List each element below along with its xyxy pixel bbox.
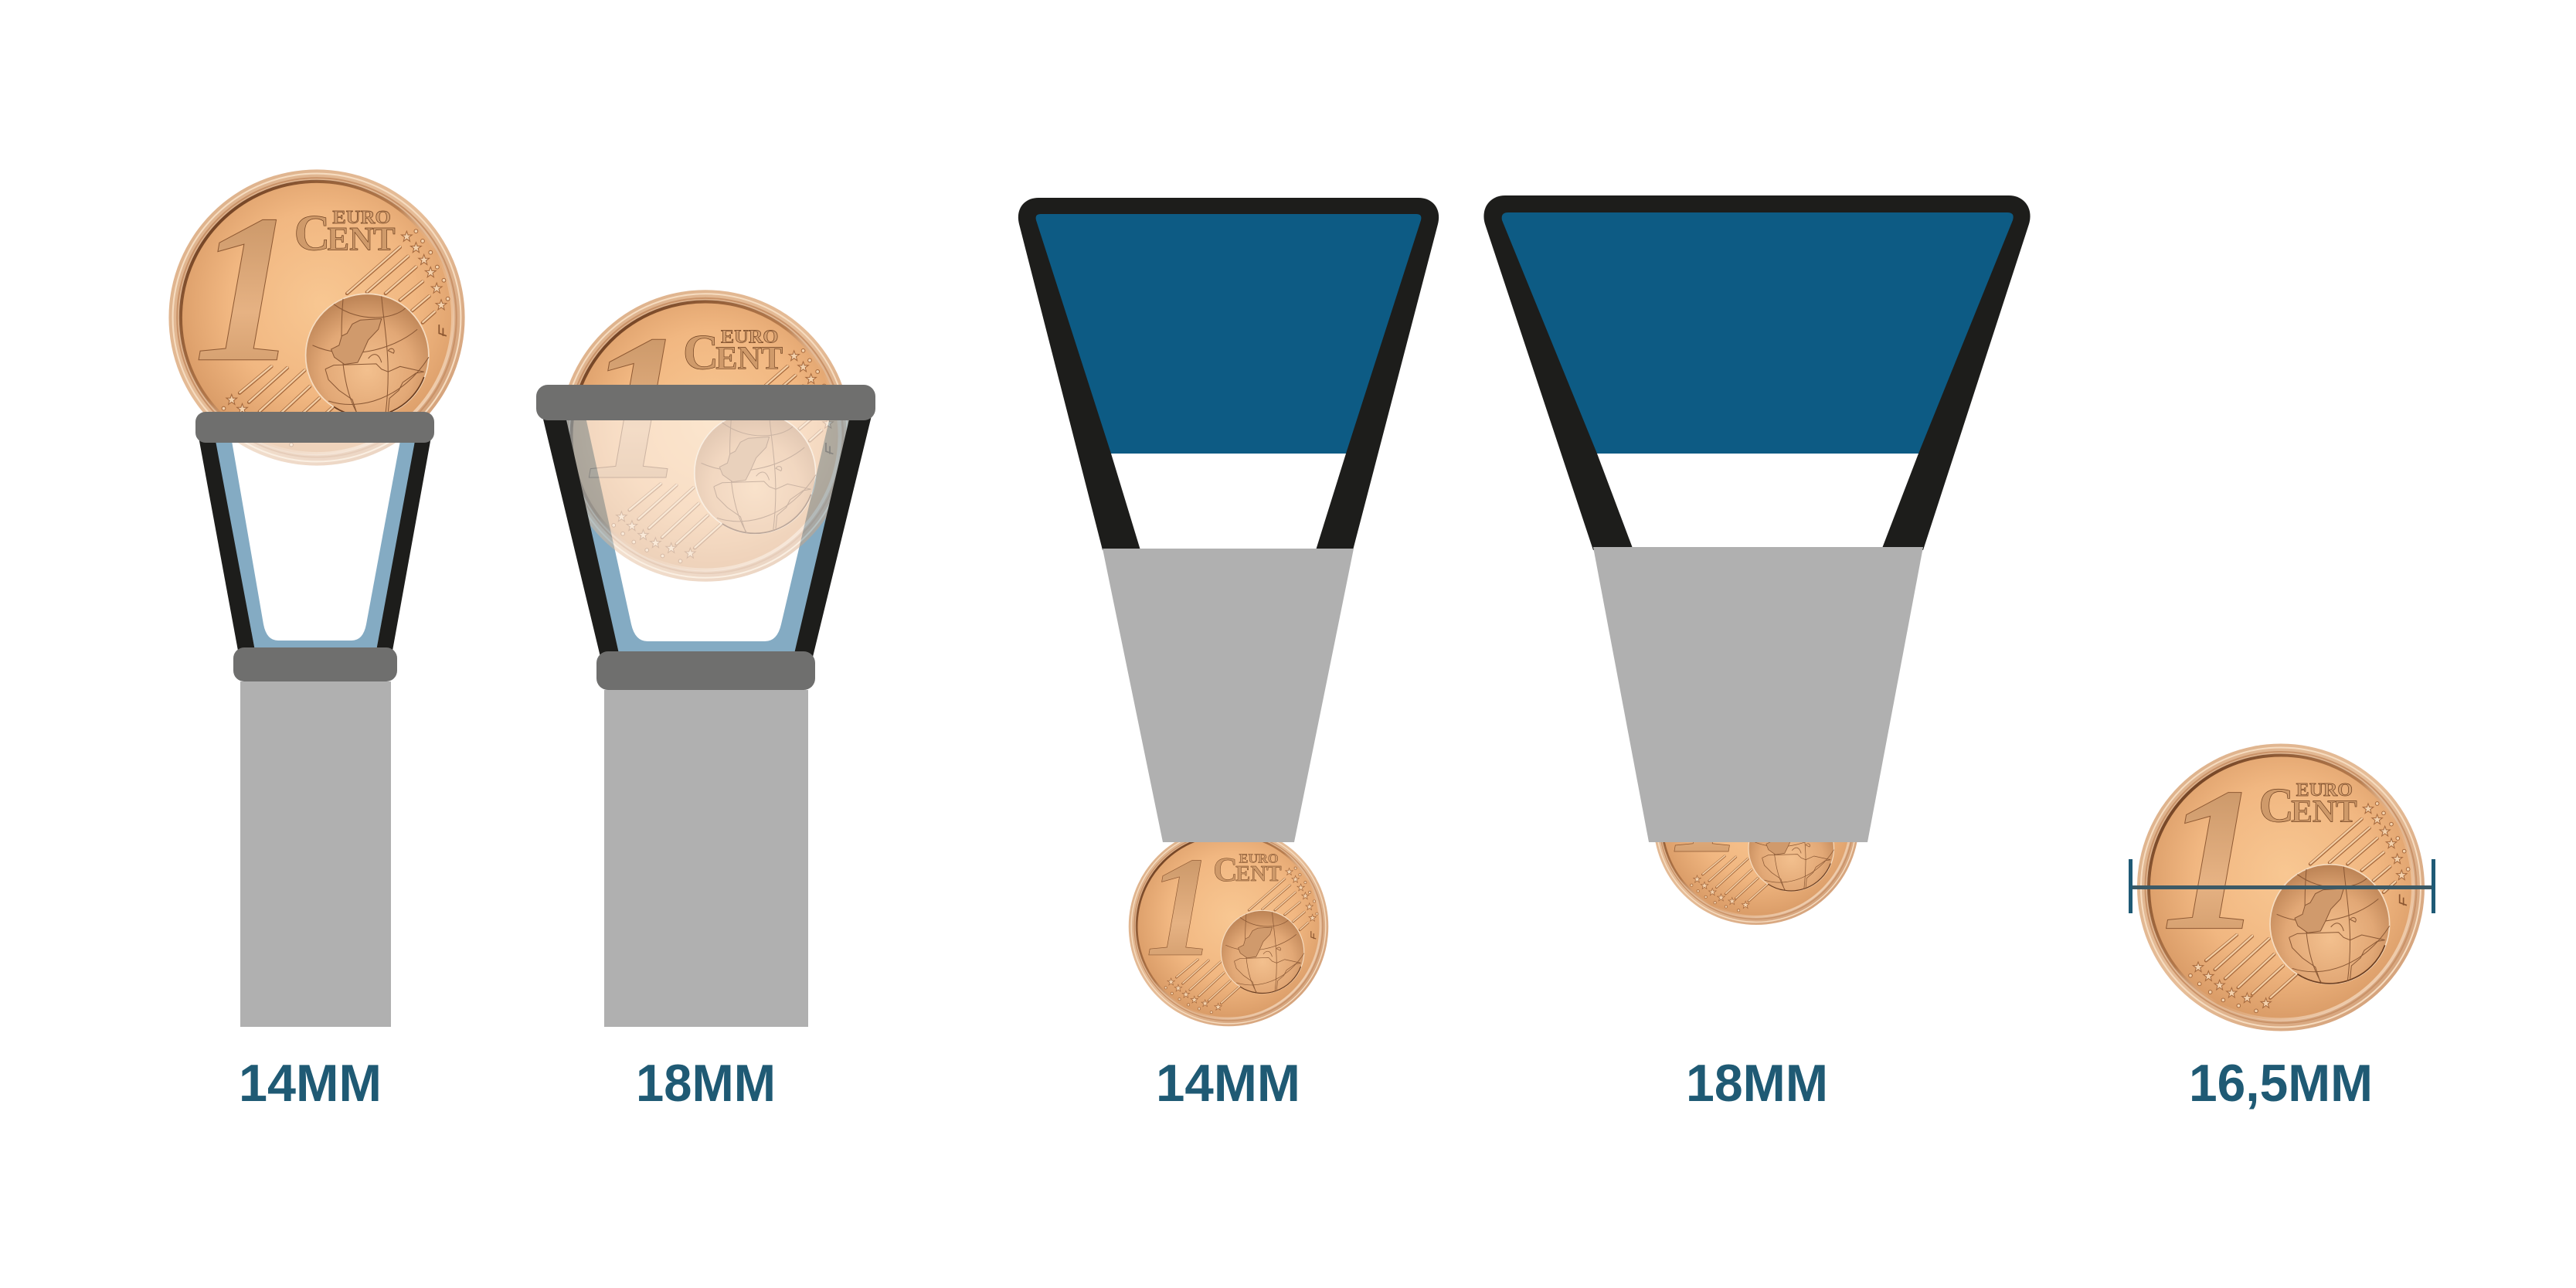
black funnel outline	[1483, 195, 2031, 550]
grey stem	[604, 690, 808, 1027]
label: 14MM: 14MM	[1156, 1054, 1300, 1113]
white hollow	[231, 437, 401, 641]
panel: coin diameter	[2129, 743, 2435, 1113]
white gap	[1111, 454, 1346, 550]
panel: coin over 14mm opening, side view	[168, 169, 465, 1113]
white hollow	[586, 417, 830, 641]
blue inner lining	[564, 417, 851, 657]
panel: 14mm funnel with coin passing through	[1018, 198, 1439, 1113]
grey tapered body	[1593, 547, 1923, 842]
coin under funnel	[1653, 719, 1859, 925]
lower grey band	[596, 651, 815, 690]
blue inner lining	[214, 437, 416, 651]
label: 18MM: 18MM	[636, 1054, 776, 1113]
grey tapered body	[1103, 549, 1354, 842]
blue fill	[1036, 214, 1421, 454]
panel: 18mm funnel with coin stuck	[1483, 195, 2031, 1113]
coin resting in opening	[168, 169, 465, 466]
black tube walls	[541, 410, 873, 657]
black funnel outline	[1018, 198, 1439, 550]
coin below funnel	[1129, 827, 1328, 1026]
coin dropped in opening	[559, 290, 851, 582]
diameter line	[2129, 859, 2435, 913]
coin full view	[2137, 743, 2425, 1031]
blue fill	[1502, 212, 2014, 454]
label: 14MM: 14MM	[239, 1054, 382, 1113]
label: 16,5MM: 16,5MM	[2189, 1054, 2373, 1113]
upper grey band	[536, 385, 875, 420]
lower grey band	[233, 647, 397, 681]
grey stem	[240, 681, 391, 1027]
panel: coin inside 18mm opening, side view	[536, 290, 875, 1113]
label: 18MM: 18MM	[1686, 1054, 1828, 1113]
upper grey band	[195, 412, 434, 443]
black tube walls	[198, 433, 432, 651]
white gap	[1597, 454, 1918, 550]
